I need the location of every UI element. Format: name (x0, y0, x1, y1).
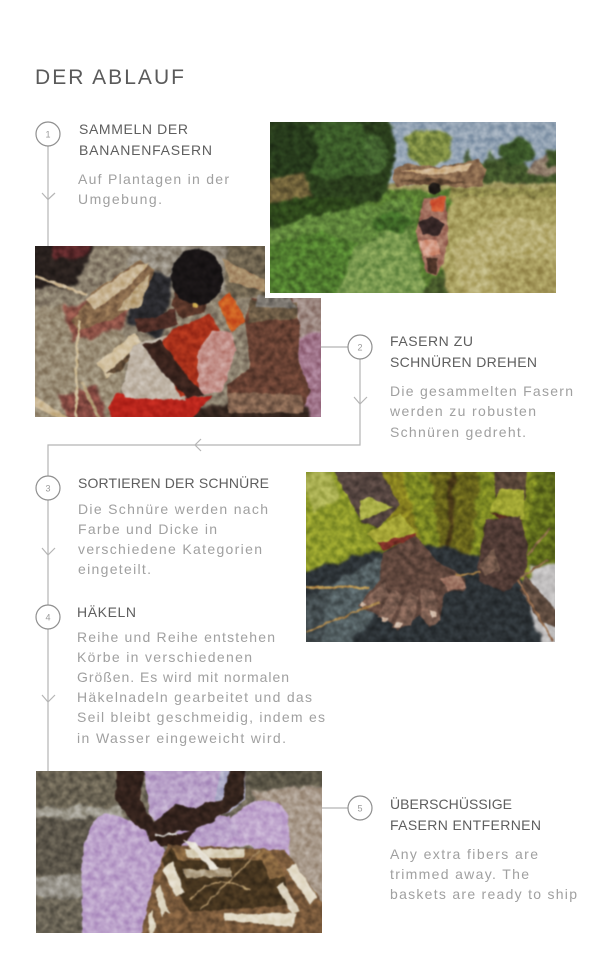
step 4 number badge (36, 605, 60, 629)
arrow: step 3 down (42, 548, 55, 555)
step 2 heading: SCHNÜREN DREHEN (390, 353, 537, 370)
step 3 description: Farbe und Dicke in (78, 521, 217, 537)
step 2 description (389, 383, 573, 440)
step 2 number badge (348, 335, 372, 359)
step 4 heading: HÄKELN (77, 604, 136, 620)
step 4 description: Körbe in verschiedenen (77, 649, 252, 665)
step 5 number badge: 5 (357, 804, 363, 814)
step 5: removing excess fibers (348, 795, 577, 902)
step 3: sorting the cords (36, 474, 269, 577)
step 1 description (78, 171, 229, 207)
step 5 description: Any extra fibers are (390, 846, 538, 862)
step 4: crocheting (36, 604, 325, 746)
step 2 number badge: 2 (357, 342, 363, 352)
step 2: twisting fibers into cords (348, 333, 573, 440)
step 4 description: Seil bleibt geschmeidig, indem es (77, 709, 325, 725)
step 3 number badge: 3 (45, 484, 51, 494)
step 1: collecting banana fibers (36, 121, 229, 207)
step 4 description: in Wasser eingeweicht wird. (77, 730, 286, 746)
step 1 number badge: 1 (45, 130, 51, 140)
step 1 heading: SAMMELN DER (79, 121, 188, 137)
step 1 description: Auf Plantagen in der (78, 171, 229, 187)
photo: hands twisting cord on a tire (306, 472, 555, 642)
step 2 description: werden zu robusten (389, 403, 536, 419)
photo: girl twisting fibers beside a stone statue (35, 246, 321, 417)
step 1 description: Umgebung. (78, 191, 162, 207)
step 1 number badge (36, 122, 60, 146)
flow connector lines (48, 146, 360, 808)
step 5 heading: ÜBERSCHÜSSIGE (390, 795, 512, 812)
photo: trimming excess fibers from a finished basket (36, 771, 322, 933)
step 5 number badge (348, 796, 372, 820)
arrow: step 4 down (42, 695, 55, 702)
step 4 description (77, 629, 325, 746)
step 4 description: Häkelnadeln gearbeitet und das (77, 689, 312, 705)
step 4 description: Reihe und Reihe entstehen (77, 629, 275, 645)
step 5 heading: FASERN ENTFERNEN (390, 817, 541, 833)
step 3 heading: SORTIEREN DER SCHNÜRE (78, 474, 269, 491)
step 5 description: trimmed away. The (390, 866, 529, 882)
step 2 description: Schnüren gedreht. (390, 424, 526, 440)
arrow: left toward step 3 (195, 439, 201, 451)
step 3 number badge (36, 476, 60, 500)
step 2 heading: FASERN ZU (390, 333, 473, 349)
step 4 description: Größen. Es wird mit normalen (77, 669, 289, 685)
step 5 heading (390, 795, 541, 833)
step 3 description (78, 501, 268, 577)
step 4 number badge: 4 (45, 612, 51, 622)
step 3 description: Die Schnüre werden nach (78, 501, 268, 517)
arrow: step 1 down (42, 193, 55, 200)
step 5 description (390, 846, 577, 902)
step 1 heading (79, 121, 212, 158)
step 3 description: eingeteilt. (78, 561, 151, 577)
step 5 description: baskets are ready to ship (390, 886, 577, 902)
step 1 heading: BANANENFASERN (79, 142, 212, 158)
step 3 description: verschiedene Kategorien (78, 541, 262, 557)
step 2 heading (390, 333, 537, 370)
title: DER ABLAUF (35, 66, 184, 89)
photo: woman carrying fibers through a field (270, 122, 556, 293)
step 2 description: Die gesammelten Fasern (390, 383, 573, 399)
arrow: step 2 down (354, 397, 367, 404)
